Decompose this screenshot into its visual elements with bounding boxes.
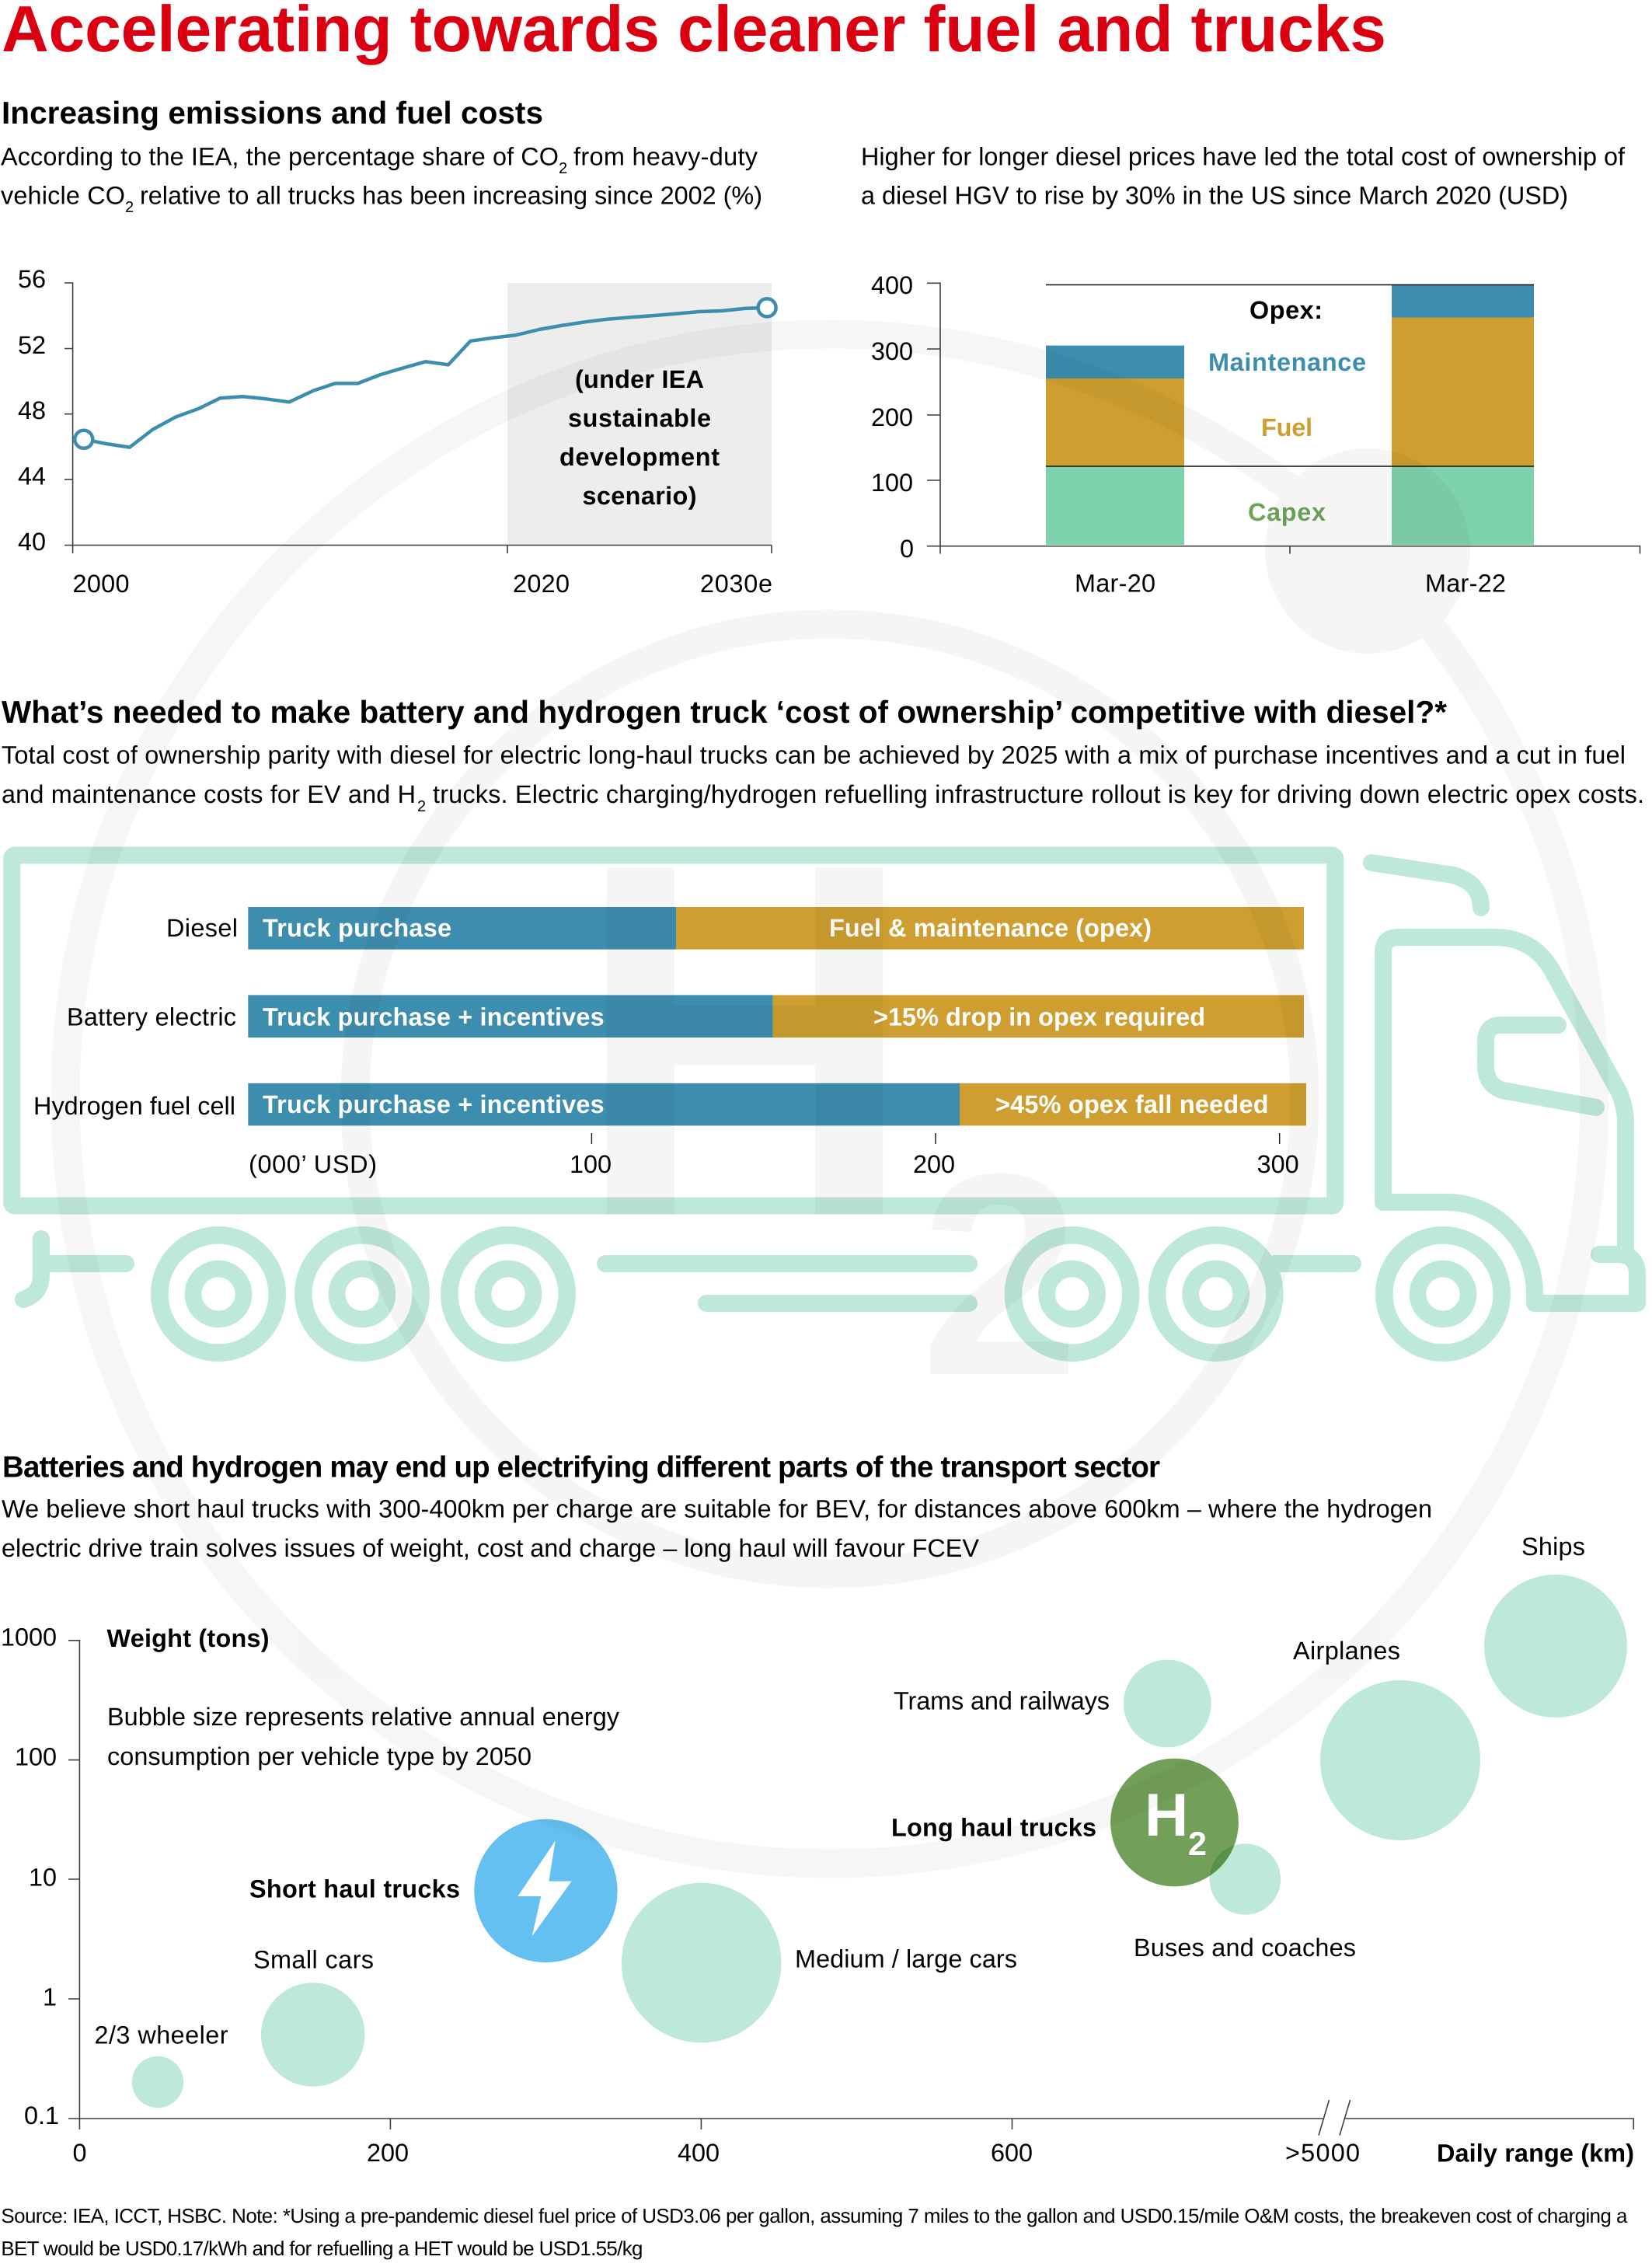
cab lower body and wheel arch (1383, 1202, 1637, 1303)
y axis labels: 1000 (1, 1623, 57, 1651)
text block: short haul vs long haul: electric drive train solves issues of weight, cost and charge – long haul will favour FCEV (2, 1534, 979, 1562)
y axis labels: 300 (871, 337, 913, 365)
x axis labels: Daily range (km) (1437, 2139, 1634, 2167)
text block: total cost of ownership parity: and maintenance costs for EV and H (2, 780, 416, 808)
scenario label: development (559, 443, 720, 471)
heading: cost of ownership competitiveness: What’s needed to make battery and hydrogen truck ‘cost of ownership’ competitive with diesel?* (2, 694, 1447, 730)
text block: IEA CO2 share intro: relative to all trucks has been increasing since 2002 (%) (140, 182, 762, 210)
x axis labels: 600 (991, 2139, 1033, 2167)
text block: diesel prices intro (861, 143, 1626, 210)
row: hydrogen fuel cell: Truck purchase + incentives (263, 1090, 605, 1118)
text block: total cost of ownership parity (2, 741, 1644, 815)
cab window (1486, 1025, 1596, 1107)
chassis lines (605, 1264, 1353, 1303)
icon: H2 symbol: H (1145, 1780, 1188, 1849)
data line (84, 308, 767, 448)
row: diesel: Fuel & maintenance (opex) (829, 914, 1152, 942)
bubble: buses and coaches: Buses and coaches (1134, 1934, 1356, 1962)
text block: total cost of ownership parity: trucks. Electric charging/hydrogen refuelling infrastructure rollout is key for driving down electric opex costs. (433, 780, 1644, 808)
value axis: 300 (1257, 1150, 1299, 1178)
x axis labels: 2030e (700, 570, 772, 598)
y axis title: Weight (tons) (107, 1624, 269, 1652)
axes (68, 1641, 1633, 2136)
y axis labels: 100 (871, 469, 913, 497)
scenario label: (under IEA (575, 365, 704, 393)
y axis labels (18, 265, 46, 556)
x axis labels: >5000 (1285, 2139, 1360, 2167)
y axis labels: 44 (18, 462, 46, 490)
legend: opex and capex: Opex: (1249, 296, 1323, 324)
text block: diesel prices intro: a diesel HGV to rise by 30% in the US since March 2020 (USD) (861, 182, 1568, 210)
bar: Mar-20 (1046, 346, 1184, 545)
bubble: short haul trucks (249, 1819, 618, 1962)
bubble: ships: Ships (1521, 1533, 1585, 1561)
end marker (758, 298, 776, 316)
y axis labels: 10 (29, 1864, 57, 1892)
bubble: airplanes (1293, 1637, 1480, 1840)
icon: H2 symbol (1145, 1780, 1207, 1863)
bar: Mar-22 (1392, 284, 1534, 545)
bubble: buses and coaches (1134, 1843, 1356, 1962)
bubble: small cars (253, 1946, 374, 2087)
x axis labels: 2000 (73, 570, 129, 598)
bubble: medium / large cars: Medium / large cars (795, 1944, 1017, 1972)
bubble: 2/3 wheeler (95, 2021, 228, 2108)
value axis: (000’ USD) (249, 1150, 377, 1178)
line chart: heavy-duty CO2 share (18, 265, 776, 598)
icon: lightning bolt (518, 1841, 572, 1936)
bubble: long haul trucks (891, 1759, 1239, 1886)
y axis labels: 1 (43, 1983, 57, 2011)
bubble size note (107, 1703, 620, 1770)
legend: opex and capex: Maintenance (1208, 348, 1366, 376)
y axis labels: 56 (18, 265, 46, 293)
y axis labels: 52 (18, 331, 46, 359)
background watermark: hydrogen ring icon (65, 334, 1594, 1864)
bubble: long haul trucks: Long haul trucks (891, 1814, 1096, 1842)
bubble: airplanes: Airplanes (1293, 1637, 1400, 1665)
text block: short haul vs long haul: We believe short haul trucks with 300-400km per charge are suitable for BEV, for distances above 600km – where the hydrogen (2, 1495, 1432, 1523)
bubble: ships (1484, 1533, 1627, 1718)
row: hydrogen fuel cell: Hydrogen fuel cell (33, 1092, 235, 1120)
bubble: short haul trucks: Short haul trucks (249, 1875, 460, 1903)
icon: truck outline (12, 855, 1637, 1353)
cab (1383, 937, 1626, 1250)
background watermark: hydrogen ring icon: 2 (920, 1114, 1080, 1435)
text block: IEA CO2 share intro: According to the IEA, the percentage share of CO (1, 143, 559, 171)
y axis labels: 100 (15, 1742, 57, 1770)
start marker (75, 431, 92, 448)
y axis labels: 200 (871, 403, 913, 431)
legend: opex and capex (1208, 296, 1366, 526)
bubble size note: consumption per vehicle type by 2050 (107, 1742, 531, 1770)
bubble chart: weight vs daily range (1, 1533, 1634, 2167)
scenario label: scenario) (583, 482, 696, 510)
y axis labels: 0.1 (24, 2101, 59, 2129)
scenario shaded band (507, 283, 772, 546)
y axis labels (1, 1623, 59, 2129)
scenario label: sustainable (568, 404, 711, 432)
text block: total cost of ownership parity: 2 (417, 798, 426, 815)
x axis labels: Mar-20 (1075, 569, 1155, 597)
bar chart: total cost of ownership by truck type (33, 907, 1306, 1178)
source note (1, 2206, 1628, 2260)
x axis labels (73, 2139, 1634, 2167)
legend: opex and capex: Fuel (1261, 413, 1312, 441)
x axis labels (73, 570, 772, 598)
value axis (249, 1133, 1299, 1178)
row: battery electric: >15% drop in opex required (873, 1003, 1205, 1031)
source note: Source: IEA, ICCT, HSBC. Note: *Using a pre-pandemic diesel fuel price of USD3.06 per gallon, assuming 7 miles to the gallon and USD0.15/mile O&M costs, the breakeven cost of charging a (1, 2206, 1628, 2227)
icon: H2 symbol: 2 (1188, 1826, 1207, 1863)
x axis labels: 2020 (513, 570, 570, 598)
heading: batteries and hydrogen: Batteries and hydrogen may end up electrifying different parts of the transport sector (2, 1450, 1160, 1484)
row: diesel: Truck purchase (263, 914, 451, 942)
text block: IEA CO2 share intro: vehicle CO (1, 182, 125, 210)
x axis labels (1075, 569, 1506, 597)
source note: BET would be USD0.17/kWh and for refuelling a HET would be USD1.55/kg (1, 2238, 643, 2260)
row: battery electric: Battery electric (67, 1003, 236, 1031)
row: hydrogen fuel cell: >45% opex fall needed (995, 1090, 1268, 1118)
bubble: 2/3 wheeler: 2/3 wheeler (95, 2021, 228, 2049)
y axis labels: 400 (871, 271, 913, 299)
row: hydrogen fuel cell (33, 1083, 1306, 1125)
trailer box (12, 855, 1335, 1206)
bubble: trams and railways (894, 1660, 1211, 1747)
row: battery electric: Truck purchase + incentives (263, 1003, 605, 1031)
scenario label (559, 365, 720, 510)
x axis labels: Mar-22 (1425, 569, 1506, 597)
bubble size note: Bubble size represents relative annual energy (107, 1703, 620, 1731)
exhaust (1371, 863, 1481, 908)
y axis labels: 0 (900, 535, 914, 563)
row: diesel (166, 907, 1304, 950)
row: diesel: Diesel (166, 914, 238, 942)
background watermark: hydrogen ring icon: H (575, 759, 915, 1321)
y axis labels (871, 271, 914, 563)
stacked bar chart: diesel HGV cost of ownership (871, 271, 1640, 597)
text block: IEA CO2 share intro: 2 (125, 199, 134, 216)
y axis labels: 40 (18, 528, 46, 556)
text block: IEA CO2 share intro: 2 (559, 160, 567, 177)
row: battery electric (67, 995, 1304, 1038)
y axis labels: 48 (18, 396, 46, 424)
bubble: small cars: Small cars (253, 1946, 374, 1974)
legend: opex and capex: Capex (1248, 498, 1326, 526)
text block: diesel prices intro: Higher for longer diesel prices have led the total cost of ownership of (861, 143, 1626, 171)
text block: IEA CO2 share intro: from heavy-duty (573, 143, 758, 171)
value axis: 100 (570, 1150, 612, 1178)
wheels (159, 1235, 1502, 1353)
bubble: medium / large cars (622, 1883, 1017, 2042)
text block: short haul vs long haul (2, 1495, 1432, 1562)
bubble: trams and railways: Trams and railways (894, 1686, 1110, 1714)
value axis: 200 (913, 1150, 955, 1178)
x axis labels: 200 (367, 2139, 409, 2167)
x axis labels: 400 (678, 2139, 720, 2167)
x axis labels: 0 (73, 2139, 87, 2167)
text block: total cost of ownership parity: Total cost of ownership parity with diesel for electric long-haul trucks can be achieved by 2025 with a mix of purchase incentives and a cut in fuel (2, 741, 1626, 769)
hitch (23, 1239, 126, 1299)
text block: IEA CO2 share intro (1, 143, 762, 216)
heading: increasing emissions and fuel costs: Increasing emissions and fuel costs (2, 95, 543, 131)
